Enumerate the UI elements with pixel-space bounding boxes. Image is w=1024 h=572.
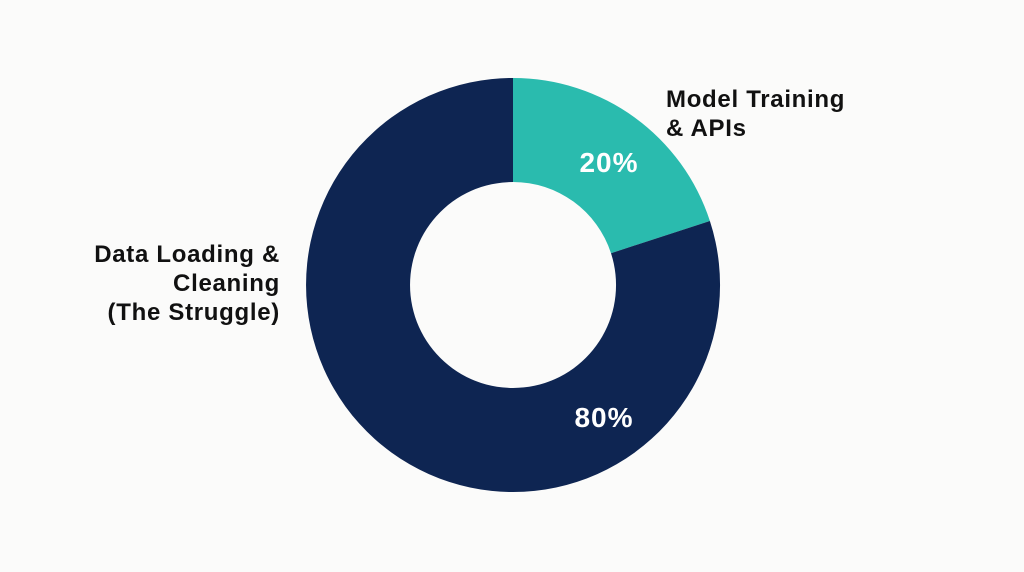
label: model training & APIs: & APIs <box>666 115 747 142</box>
label: model training & APIs: Model Training <box>666 86 845 113</box>
value label 20%: 20% <box>579 147 639 178</box>
label: data loading & cleaning: (The Struggle) <box>108 299 280 326</box>
label: model training & APIs <box>666 86 845 142</box>
label: data loading & cleaning: Cleaning <box>173 270 280 297</box>
segment: model training 20% <box>513 78 710 253</box>
segment: data loading 80% <box>306 78 720 492</box>
label: data loading & cleaning: Data Loading & <box>94 241 280 268</box>
label: data loading & cleaning <box>94 241 280 326</box>
value label 80%: 80% <box>574 402 634 433</box>
